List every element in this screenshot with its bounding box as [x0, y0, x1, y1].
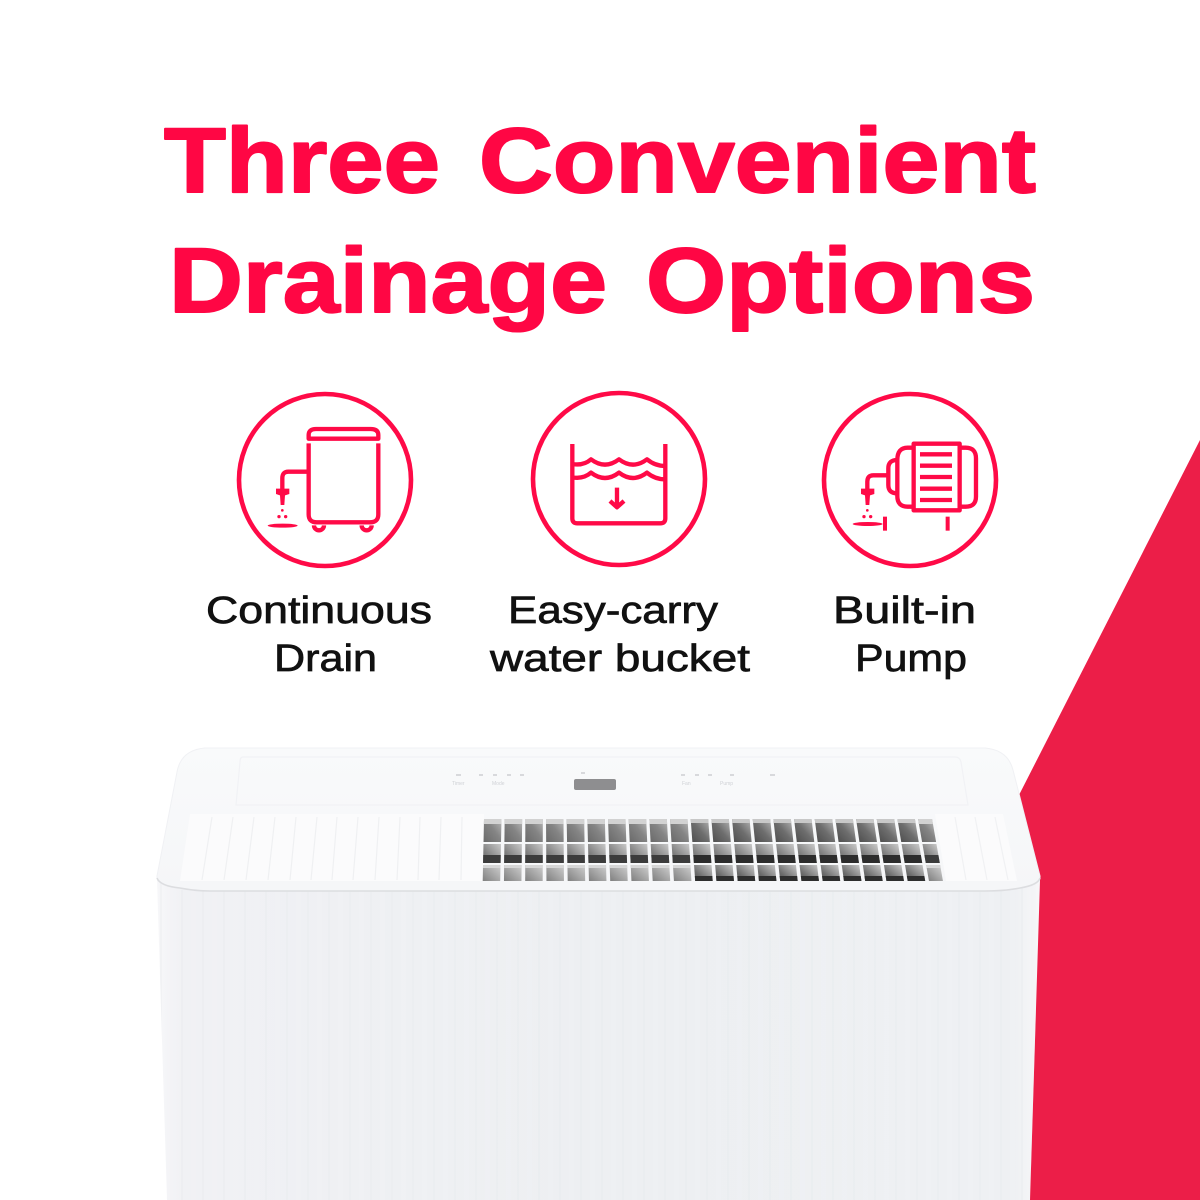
label: easy-carry water bucket [489, 590, 751, 680]
red diagonal shape [1018, 440, 1200, 1200]
title [164, 110, 1036, 332]
icon: water bucket [533, 393, 705, 565]
control panel: Timer [452, 781, 465, 787]
label: continuous drain: Drain [274, 638, 377, 680]
left louver panel [180, 814, 484, 881]
control panel: Pump [720, 781, 733, 787]
air vent grille [483, 819, 943, 881]
icon: built-in pump [824, 394, 996, 566]
label: continuous drain [206, 590, 432, 680]
label: easy-carry water bucket: water bucket [489, 638, 751, 680]
control panel [452, 773, 775, 790]
label: built-in pump [833, 590, 976, 680]
label: continuous drain: Continuous [206, 590, 432, 632]
device top lid [157, 748, 1040, 891]
control panel: Mode [492, 781, 505, 787]
title: Drainage [169, 230, 607, 332]
control panel: Fan [682, 781, 691, 787]
right louver panel [935, 814, 1017, 881]
title: Options [646, 230, 1035, 332]
device body [157, 880, 1040, 1200]
dehumidifier product [157, 748, 1040, 1200]
label: built-in pump: Pump [855, 638, 967, 680]
title: Three [164, 110, 440, 212]
title: Convenient [479, 110, 1036, 212]
icon: continuous drain [239, 394, 411, 566]
label: built-in pump: Built-in [833, 590, 976, 632]
label: easy-carry water bucket: Easy-carry [508, 590, 718, 632]
